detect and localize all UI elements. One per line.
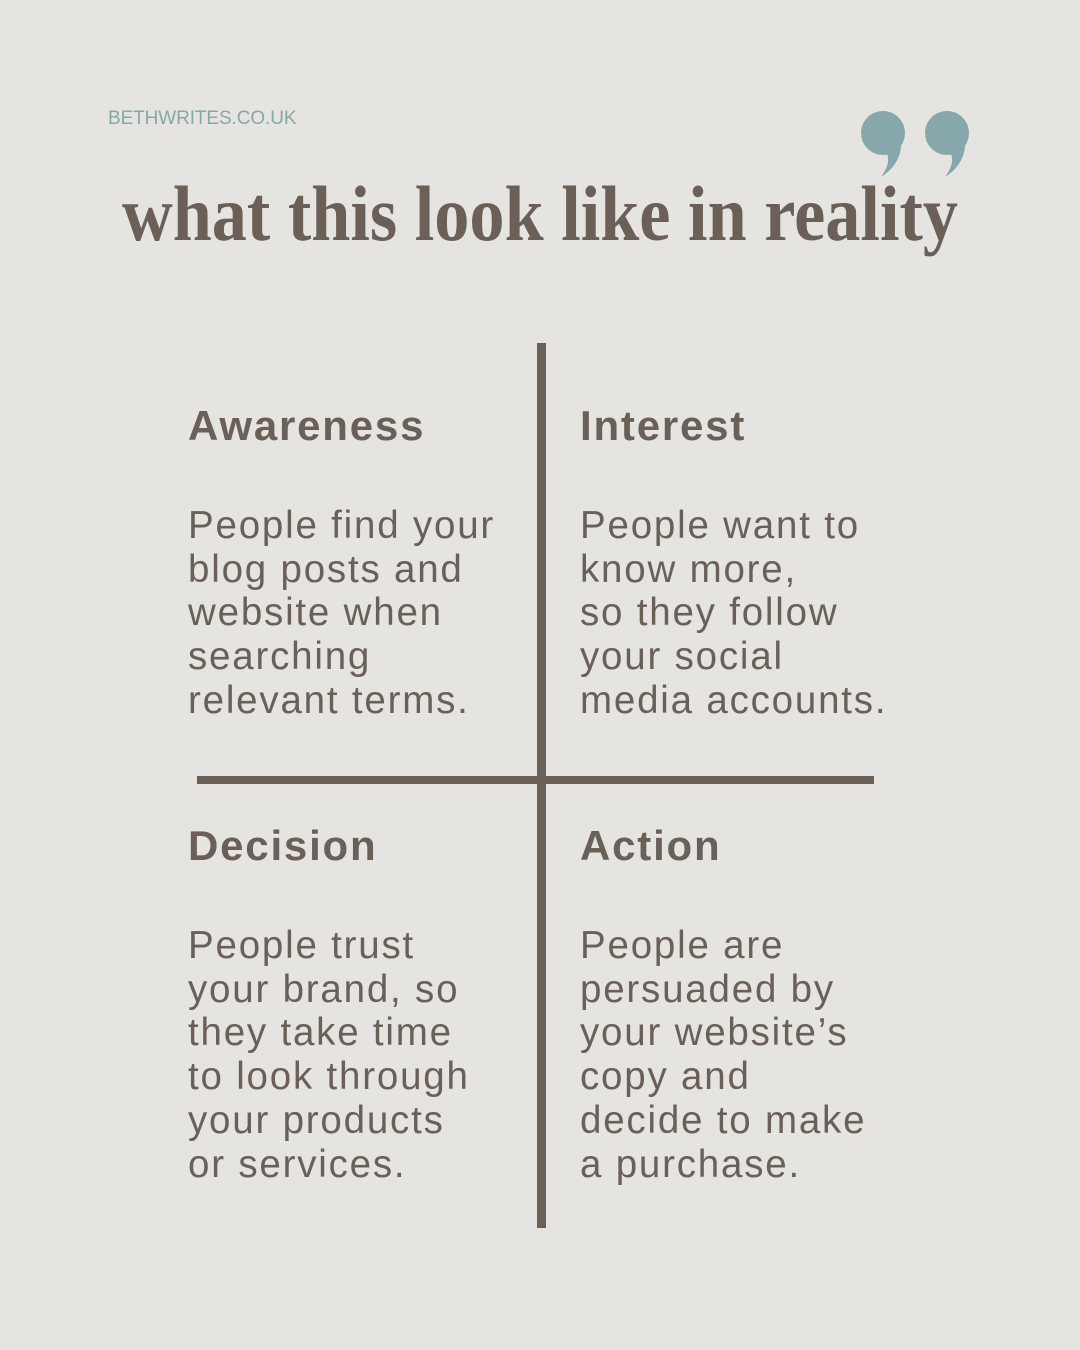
text: action: your website’s: [580, 1011, 848, 1054]
text: decision: they take time: [188, 1011, 453, 1054]
text: action: [580, 924, 866, 1186]
heading: interest: Interest: [580, 402, 746, 449]
text: decision: [188, 924, 470, 1186]
text: awareness: searching: [188, 635, 371, 678]
text: interest: People want to: [580, 504, 860, 547]
text: interest: know more,: [580, 548, 797, 591]
heading: awareness: Awareness: [188, 402, 425, 449]
text: action: persuaded by: [580, 968, 835, 1011]
text: action: People are: [580, 924, 784, 967]
panel: decision: [188, 822, 470, 1186]
panel: action: [580, 822, 866, 1186]
text: decision: your products: [188, 1099, 445, 1142]
text: awareness: website when: [188, 591, 443, 634]
text: action: a purchase.: [580, 1143, 801, 1186]
vertical divider: [537, 343, 546, 1228]
text: decision: to look through: [188, 1055, 470, 1098]
text: interest: so they follow: [580, 591, 838, 634]
text: decision: your brand, so: [188, 968, 459, 1011]
text: interest: your social: [580, 635, 784, 678]
heading: action: Action: [580, 822, 721, 869]
text: action: copy and: [580, 1055, 751, 1098]
text: awareness: blog posts and: [188, 548, 464, 591]
heading: decision: Decision: [188, 822, 377, 869]
text: decision: People trust: [188, 924, 415, 967]
title: what this look like in reality: [122, 170, 958, 257]
text: decision: or services.: [188, 1143, 406, 1186]
panel: awareness: [188, 402, 495, 722]
text: interest: [580, 504, 887, 722]
site label: BETHWRITES.CO.UK: [108, 108, 296, 129]
panel: interest: [580, 402, 887, 722]
horizontal divider: [197, 776, 874, 784]
text: action: decide to make: [580, 1099, 866, 1142]
text: awareness: relevant terms.: [188, 679, 470, 722]
text: interest: media accounts.: [580, 679, 887, 722]
text: awareness: People find your: [188, 504, 495, 547]
icon: quote marks: [861, 111, 969, 177]
text: awareness: [188, 504, 495, 722]
